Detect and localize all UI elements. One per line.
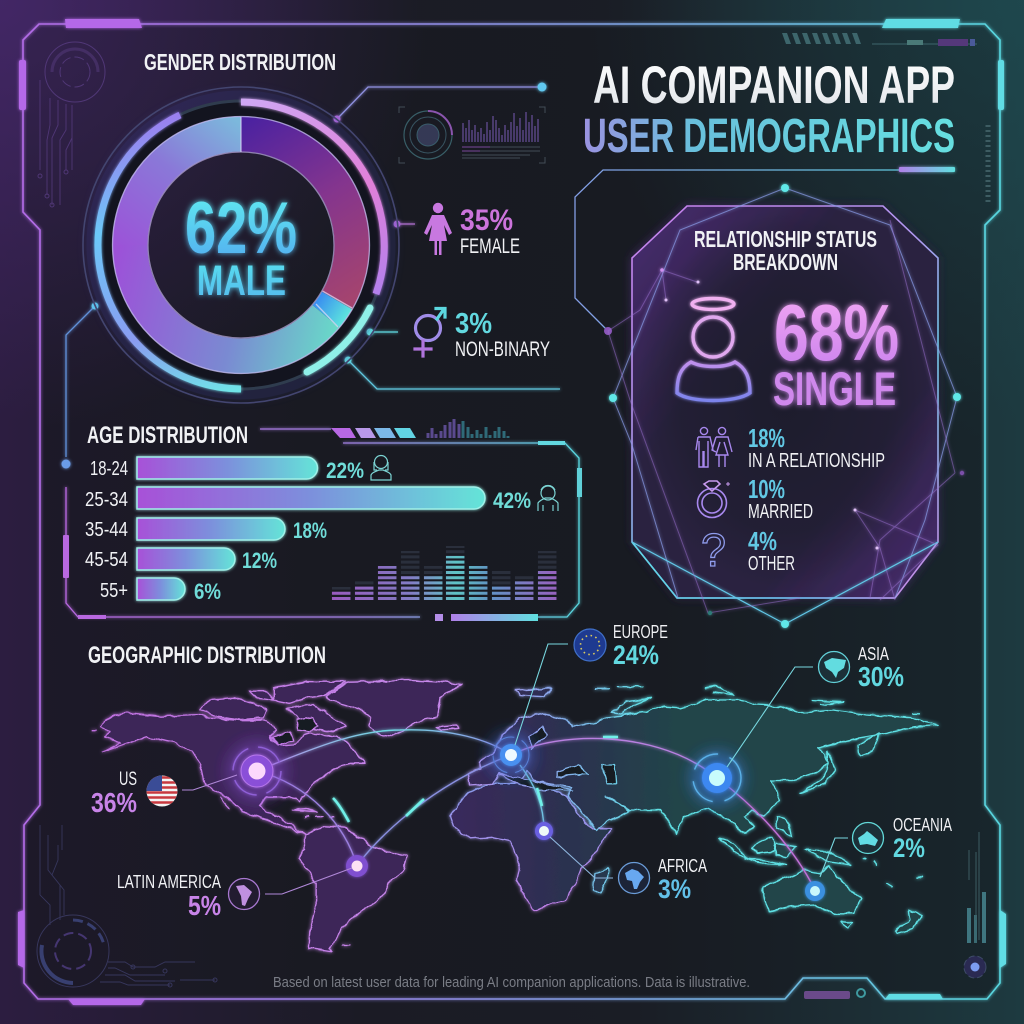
label: latin america: LATIN AMERICA [117,872,221,892]
label: asia [818,644,904,692]
label: asia: 30% [858,661,904,692]
legend: female [424,203,520,258]
bar 25-34 [85,487,531,513]
label: africa [618,856,707,904]
bar 18-24: 22% [326,458,364,483]
node: us [227,741,287,801]
stat: 68% single: 68% [774,288,899,377]
bar 18-24 [90,457,364,483]
stat: 10% married: MARRIED [748,501,813,523]
map nodes [227,733,825,901]
bar 45-54: 45-54 [85,549,128,571]
bar 25-34: 42% [493,488,531,513]
bar chart: age distribution [85,457,531,604]
node: latin america [346,855,368,877]
decorative hud: top left [38,42,105,207]
center label: 62% [185,188,297,269]
stat: 4% other: OTHER [748,553,795,575]
label: us [92,772,178,812]
mini dashboard [399,107,545,163]
outer arc: teal [307,308,370,372]
stat: 68% single [773,288,899,415]
label: africa: AFRICA [658,856,707,876]
segment: male 62% [130,134,326,356]
route arcs [257,730,815,890]
bar 55+: 55+ [100,580,128,602]
legend: non-binary [415,308,550,361]
center label [185,188,297,305]
stat: 4% other [748,526,795,575]
node: africa [535,822,553,840]
icon: south america globe [228,878,260,910]
stat: 10% married: 10% [748,474,785,504]
icon: young man [538,486,558,511]
decorative hud: bottom left [37,825,217,987]
node: europe [489,733,533,777]
stat: 18% in a relationship [748,423,885,472]
age heading: AGE DISTRIBUTION [87,422,248,449]
map: americas [92,680,462,952]
icon: africa globe [618,862,650,894]
node: asia [691,752,743,804]
label: europe: 24% [613,640,659,670]
node: oceania [805,881,825,901]
icon: ring [698,481,730,518]
stat: 18% in a relationship: IN A RELATIONSHIP [748,450,885,472]
stat: 18% in a relationship: 18% [748,423,785,453]
decorative hud: top right [782,33,988,203]
icon: eu flag [574,629,606,661]
icon: single person with halo [677,298,750,400]
stat: 10% married [748,474,813,523]
label: europe [574,622,668,670]
label: oceania: 2% [893,833,925,863]
icon: couple [696,427,732,467]
map: europe asia africa oceania [450,686,938,933]
label: oceania [852,815,952,863]
stat: 4% other: 4% [748,526,777,556]
text: 35% female: 35% [460,204,513,237]
gender heading: GENDER DISTRIBUTION [144,49,336,75]
text: 3% non-binary: 3% [455,308,492,340]
icon: gender symbol [415,308,445,356]
icon: us flag [146,775,178,807]
title [583,56,955,163]
segment: female 35% [241,134,352,300]
icon: oceania globe [852,822,884,854]
leader lines [182,644,848,894]
outer arc: right pink [241,102,384,294]
bar 25-34: 25-34 [85,489,128,511]
footer note: Based on latest user data for leading AI companion applications. Data is illustrative. [273,974,750,991]
panel heading: RELATIONSHIP STATUS [694,226,877,252]
world map [92,680,938,952]
label: latin america [117,872,260,921]
age frame decorations [63,419,582,621]
bar 55+: 6% [194,579,221,604]
text: 3% non-binary: NON-BINARY [455,338,550,361]
label: europe: EUROPE [613,622,668,642]
icon: question mark: ? [701,524,726,576]
panel heading: BREAKDOWN [733,249,838,275]
icon: female figure [424,203,452,255]
bar 45-54 [85,548,277,573]
panel heading [694,226,877,275]
connector lines: gender [62,82,560,468]
text: 35% female: FEMALE [460,235,520,258]
panel: relationship status [608,184,964,628]
bar 35-44: 35-44 [85,519,128,541]
network lines [608,184,964,628]
chart: decorative equalizer [341,546,547,600]
bar 35-44: 18% [293,518,327,543]
label: us: US [119,769,137,790]
label: africa: 3% [658,874,691,904]
text: 35% female [460,204,520,258]
label: oceania: OCEANIA [893,815,952,835]
label: us: 36% [91,787,137,818]
panel shape [632,206,938,598]
bar 35-44 [85,518,327,543]
donut chart: gender [83,87,399,403]
stat: 68% single: SINGLE [773,362,896,415]
bar 45-54: 12% [242,548,277,573]
label: asia: ASIA [858,644,889,664]
connector lines: relationship [575,167,955,335]
icon: young woman [371,456,391,480]
donut edges [112,116,370,374]
icon: asia globe [818,652,850,682]
bar 55+ [100,578,221,604]
label: latin america: 5% [188,890,221,921]
bar 18-24: 18-24 [90,458,128,480]
center label: MALE [197,257,286,305]
geographic heading: GEOGRAPHIC DISTRIBUTION [88,642,326,669]
text: 3% non-binary [455,308,550,361]
decorative hud: bottom right [804,832,986,999]
outer arc: left blue [98,115,241,389]
segment: non-binary 3% [326,300,337,316]
